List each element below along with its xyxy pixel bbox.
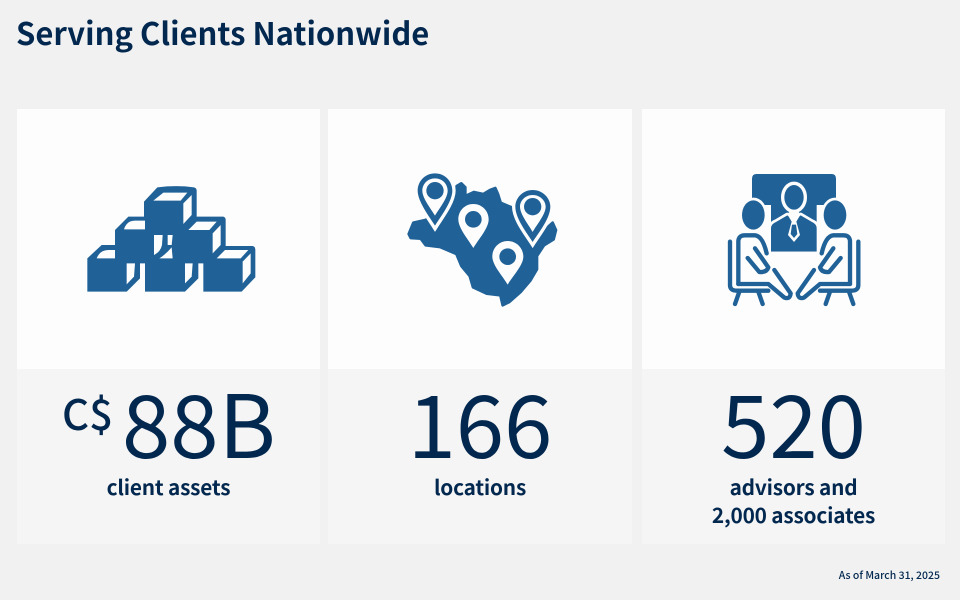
value: 88B bbox=[122, 358, 276, 484]
panel lower: people bbox=[642, 369, 945, 544]
stat: C$ 88B bbox=[62, 358, 276, 484]
presenter bbox=[767, 185, 822, 255]
icon: map with location pins bbox=[407, 173, 558, 307]
pin: northwest outlined bbox=[418, 173, 452, 226]
icon: meeting with three people bbox=[728, 174, 860, 306]
screen bbox=[752, 174, 836, 252]
label: advisors and associates: advisors and bbox=[730, 471, 857, 501]
pin: south white bbox=[492, 241, 523, 285]
currency prefix: C$ bbox=[62, 382, 113, 443]
panel: people bbox=[642, 109, 945, 369]
label: client assets: client assets bbox=[107, 471, 230, 501]
stat: 520: 520 bbox=[721, 358, 866, 484]
label: advisors and associates bbox=[712, 471, 875, 529]
stat: 166: 166 bbox=[408, 358, 552, 484]
panel lower: locations bbox=[328, 369, 632, 544]
footnote: As of March 31, 2025 bbox=[839, 568, 940, 583]
title: Serving Clients Nationwide bbox=[16, 9, 429, 54]
panel: client assets bbox=[17, 109, 320, 369]
left person bbox=[730, 200, 791, 304]
pin: center white bbox=[458, 204, 489, 248]
icon: stacked cubes bbox=[87, 186, 256, 292]
label: locations: locations bbox=[434, 471, 526, 501]
right person bbox=[798, 200, 858, 304]
panel lower: client assets bbox=[17, 369, 320, 544]
label: advisors and associates: 2,000 associates bbox=[712, 499, 875, 529]
pin: east outlined bbox=[515, 190, 550, 242]
panel: locations bbox=[328, 109, 632, 369]
